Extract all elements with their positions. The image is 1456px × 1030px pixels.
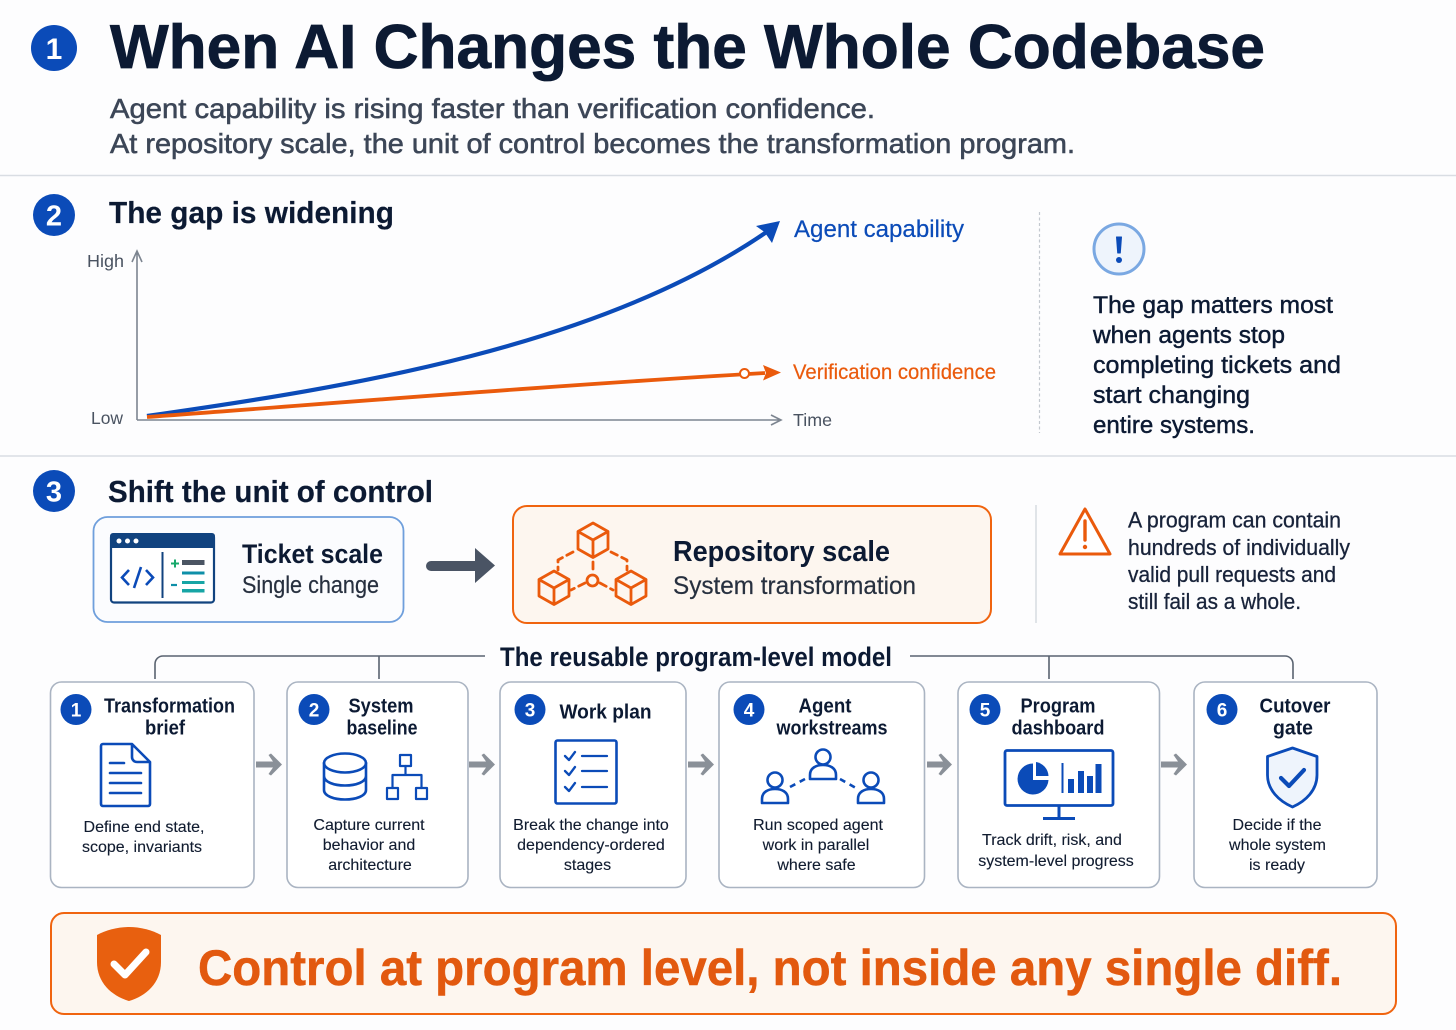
step description: [82, 819, 204, 856]
step description: [978, 832, 1134, 870]
ticket scale text: [242, 539, 383, 599]
step title: Cutover: [1260, 696, 1331, 718]
warning text: [1128, 508, 1350, 614]
arrow 2 to 3: [469, 754, 495, 776]
repository scale text: [673, 536, 916, 600]
arrow 3 to 4: [688, 754, 714, 776]
icon: monitor dashboard: [1005, 750, 1113, 818]
callout text: start changing: [1093, 382, 1250, 409]
step description: Track drift, risk, and: [982, 832, 1122, 849]
step number 2: [298, 694, 330, 725]
icon: code window: [110, 533, 215, 602]
step number 1: [60, 694, 92, 725]
warning text: A program can contain: [1128, 508, 1341, 532]
axis labels: High: [87, 251, 124, 271]
step title: gate: [1273, 718, 1313, 740]
step title: [104, 696, 235, 740]
chart axes: [132, 251, 781, 425]
step number 2: 2: [309, 700, 319, 722]
callout text: entire systems.: [1093, 412, 1255, 439]
step description: behavior and: [323, 837, 415, 854]
title: When AI Changes the Whole Codebase: [110, 13, 1265, 82]
step title: [346, 696, 418, 740]
step description: scope, invariants: [82, 839, 202, 856]
step description: system-level progress: [978, 853, 1134, 870]
series: agent capability: [147, 216, 965, 416]
ticket scale text: Single change: [242, 572, 379, 599]
step description: Run scoped agent: [753, 817, 883, 834]
step description: whole system: [1228, 837, 1326, 854]
step number 6: [1206, 694, 1238, 725]
step number 4: 4: [744, 700, 755, 722]
step description: architecture: [328, 857, 412, 874]
step title: workstreams: [776, 718, 888, 740]
badge: 3: [33, 470, 75, 512]
step number 5: [970, 694, 1000, 725]
step number 1: 1: [71, 700, 82, 722]
step title: [1260, 696, 1331, 740]
subtitle: At repository scale, the unit of control becomes the transformation program.: [110, 128, 1075, 159]
section: shift the unit of control: [33, 470, 1350, 623]
banner: key takeaway: [51, 913, 1396, 1014]
badge: 2: [33, 194, 75, 236]
model heading with bracket: [155, 642, 1293, 679]
step title: Agent: [798, 696, 852, 718]
step description: [753, 817, 883, 874]
step number 3: [514, 694, 546, 725]
step description: work in parallel: [762, 837, 869, 854]
warning text: still fail as a whole.: [1128, 589, 1301, 614]
section: the gap is widening: [33, 194, 1341, 439]
series: verification confidence: Verification confidence: [793, 360, 996, 384]
step number 3: 3: [525, 700, 535, 722]
step number 6: 6: [1217, 700, 1227, 722]
step description: where safe: [776, 857, 856, 874]
card 1: transformation brief: [50, 682, 254, 888]
callout text: completing tickets and: [1093, 352, 1341, 379]
arrow 5 to 6: [1161, 754, 1187, 776]
arrow: ticket to repository: [426, 548, 495, 583]
axis labels: Low: [91, 408, 123, 428]
series: verification confidence: [147, 360, 996, 417]
badge: 1: [31, 25, 77, 71]
callout text: when agents stop: [1092, 322, 1285, 349]
step title: dashboard: [1012, 718, 1104, 740]
panel: ticket scale: [94, 517, 404, 622]
callout text: The gap matters most: [1093, 292, 1333, 319]
axis labels: Time: [793, 410, 832, 430]
icon: warning triangle: [1060, 509, 1110, 554]
step number 4: [734, 694, 764, 725]
step description: [313, 817, 425, 874]
card 6: cutover gate: [1194, 682, 1377, 888]
step description: Define end state,: [84, 819, 204, 836]
warning text: hundreds of individually: [1128, 535, 1350, 560]
step description: Break the change into: [513, 817, 669, 834]
step number 5: 5: [980, 700, 991, 722]
bracket connectors: [155, 656, 1293, 679]
callout text: [1092, 292, 1341, 439]
card 5: program dashboard: [958, 682, 1160, 888]
icon: exclamation: [1094, 224, 1144, 274]
step title: System: [348, 696, 414, 718]
icon: three agents: [762, 750, 884, 803]
repository scale text: System transformation: [673, 572, 916, 600]
axis labels: [87, 251, 832, 430]
line chart: [87, 216, 996, 430]
icon: database and hierarchy: [324, 754, 427, 800]
badge: 2: 2: [46, 200, 62, 232]
icon: connected cubes: [539, 523, 646, 604]
step description: stages: [564, 857, 611, 874]
icon: shield check: [1268, 748, 1317, 807]
panel: repository scale: [513, 506, 991, 623]
ticket scale text: Ticket scale: [242, 539, 383, 569]
heading: the gap is widening: The gap is widening: [109, 195, 394, 230]
step title: baseline: [346, 718, 418, 740]
arrow 1 to 2: [256, 754, 282, 776]
step title: [1012, 696, 1104, 740]
subtitle: [110, 93, 1075, 159]
step title: Program: [1020, 696, 1096, 718]
step description: dependency-ordered: [517, 837, 665, 854]
step description: is ready: [1249, 857, 1305, 874]
step description: [1228, 817, 1326, 874]
step description: Decide if the: [1233, 817, 1322, 834]
card 4: agent workstreams: [719, 682, 924, 888]
subtitle: Agent capability is rising faster than verification confidence.: [110, 93, 875, 124]
step description: Capture current: [313, 817, 425, 834]
badge: 1: 1: [46, 33, 62, 66]
callout: program warning: [1060, 508, 1350, 614]
step description: [513, 817, 669, 874]
icon: document: [101, 744, 150, 806]
icon: checklist: [556, 740, 616, 804]
step title: Transformation: [104, 696, 235, 718]
warning text: valid pull requests and: [1128, 562, 1336, 587]
icon: orange shield: [97, 927, 161, 1001]
heading: reusable model: The reusable program-level model: [500, 642, 892, 672]
step title: [776, 696, 888, 740]
card 3: work plan: [500, 682, 686, 888]
header section: [31, 13, 1265, 159]
repository scale text: Repository scale: [673, 536, 890, 568]
heading: shift the unit of control: Shift the unit of control: [108, 474, 433, 509]
series: agent capability: Agent capability: [794, 216, 965, 243]
banner text: Control at program level, not inside any single diff.: [198, 940, 1342, 996]
step title: Work plan: [560, 702, 652, 724]
step title: brief: [145, 718, 185, 740]
arrow 4 to 5: [927, 754, 952, 776]
callout: why the gap matters: [1092, 224, 1341, 439]
card 2: system baseline: [287, 682, 468, 888]
badge: 3: 3: [46, 476, 62, 508]
